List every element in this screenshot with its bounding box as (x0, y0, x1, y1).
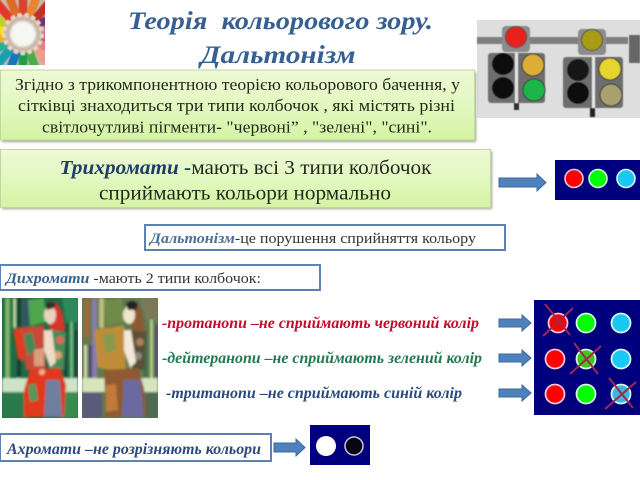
panel: trichromats: сприймають кольори нормально (99, 182, 391, 204)
title: Дальтонізм (198, 40, 356, 69)
icon: coloured pencils (0, 0, 45, 65)
panel: trichromatic theory text (0, 70, 476, 142)
painting: normal vision (2, 298, 78, 418)
panel: dichromat colour dots (534, 300, 640, 415)
panel: trichromats: Трихромати -мають всі 3 типи колбочок (60, 157, 432, 179)
arrow: achromats (274, 439, 305, 456)
text: protanopes: -протанопи –не сприймають червоний колір (162, 315, 479, 332)
panel: trichromatic theory text: світлочутливі пігменти- "червоні” , "зелені", "сині". (42, 118, 432, 136)
arrow: protanopes (499, 315, 531, 331)
callout: achromats (0, 434, 271, 461)
callout: dichromats: Дихромати -мають 2 типи колбочок: (4, 271, 261, 287)
callout: achromats: Ахромати –не розрізняють кольори (6, 441, 261, 458)
panel: trichromats (0, 150, 492, 209)
text: deuteranopes: -дейтеранопи –не сприймають зелений колір (162, 350, 482, 367)
panel: trichromatic theory text: сітківці знаходиться три типи колбочок , які містять різні (18, 96, 455, 115)
arrow: trichromats (499, 174, 546, 191)
panel: achromat dots (310, 425, 370, 465)
arrow: tritanopes (499, 385, 531, 401)
text: tritanopes: -тританопи –не сприймають синій колір (166, 385, 462, 402)
photo: traffic lights (477, 20, 640, 118)
arrow: deuteranopes (499, 350, 531, 366)
panel: trichromatic theory text: Згідно з трикомпонентною теорією кольорового бачення, у (15, 75, 461, 94)
panel: normal colour dots (555, 160, 640, 200)
callout: daltonism definition (145, 225, 505, 250)
callout: dichromats (0, 265, 320, 290)
title (128, 6, 433, 69)
painting: colour-blind vision (82, 298, 158, 418)
callout: daltonism definition: Дальтонізм -це порушення сприйняття кольору (148, 231, 477, 247)
title: Теорія кольорового зору. (128, 6, 433, 35)
